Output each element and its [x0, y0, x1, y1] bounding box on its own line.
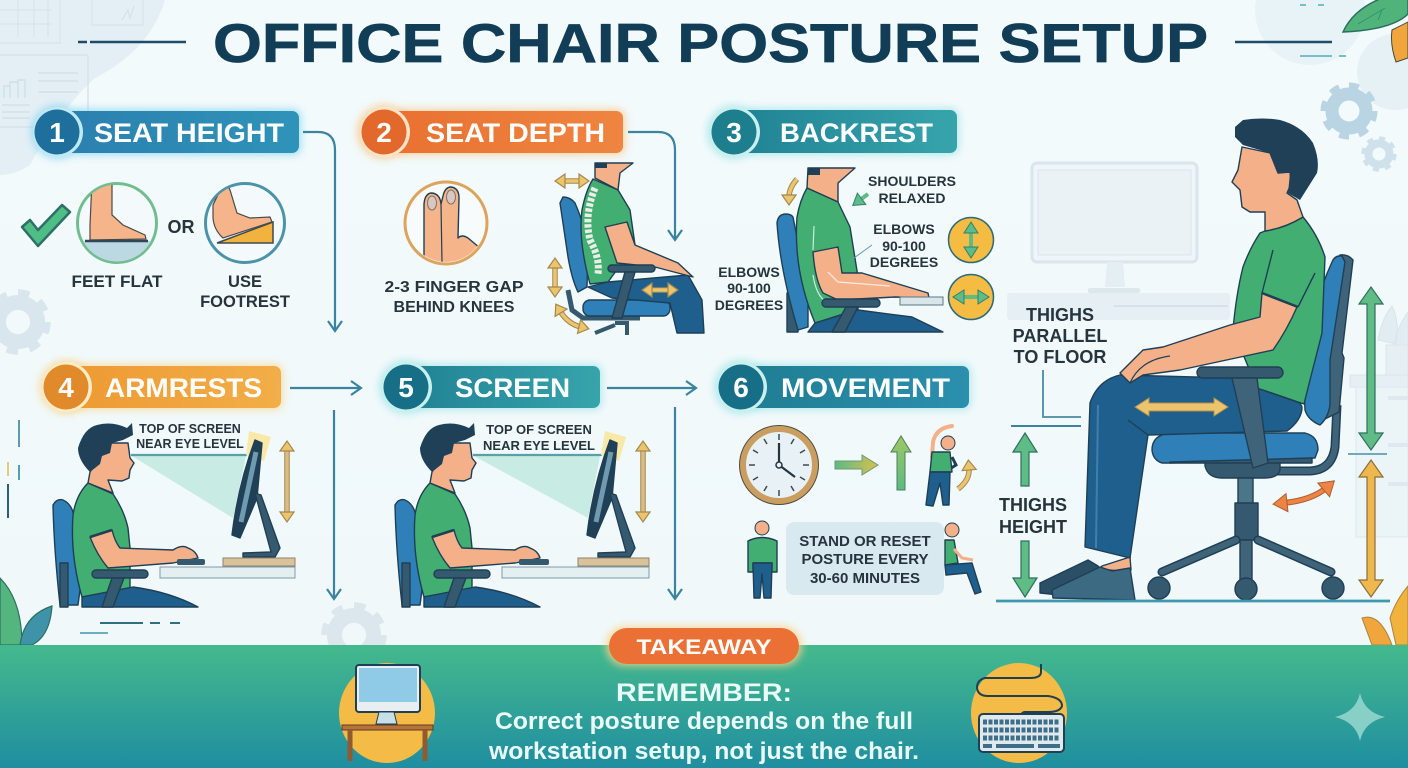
heading: armrests [39, 360, 283, 414]
heading: seat height: 1 [49, 117, 65, 148]
arrow: gold tilt [560, 311, 581, 327]
arrow: green up [891, 436, 911, 490]
arrow: step 1 to step 4 [303, 132, 335, 331]
panel: takeaway band [0, 626, 1408, 768]
callout: stand or reset: STAND OR RESET [799, 533, 931, 550]
arrow: gold down [789, 179, 797, 197]
label: elbows left: 90-100 [727, 280, 771, 296]
desk [160, 558, 295, 578]
viewing cone [132, 456, 246, 518]
icon: sparkle [1335, 693, 1385, 741]
label: shoulders relaxed: RELAXED [879, 190, 945, 206]
icon: vertical adjust [948, 218, 994, 262]
arrow: gold curved [958, 468, 969, 489]
figure: seated backrest [777, 168, 943, 332]
figure: standing person [748, 521, 777, 598]
heading: seat height: SEAT HEIGHT [94, 118, 285, 148]
icon: background gear left [0, 293, 47, 351]
heading: screen: SCREEN [455, 373, 570, 403]
panel: step 2 seat depth [357, 105, 704, 335]
icon: background gear small [1364, 138, 1394, 170]
label: thighs parallel: PARALLEL [1013, 326, 1107, 346]
label: thighs parallel: THIGHS [1026, 305, 1094, 325]
figure: seated person [1040, 118, 1325, 600]
heading: seat height [31, 105, 301, 159]
decorative background: top-left office motifs [0, 0, 165, 175]
label: elbows left: ELBOWS [718, 264, 780, 280]
icon: background gear bottom [321, 602, 387, 645]
arrow: step 2 to step 3 [628, 132, 675, 240]
label: thighs parallel: TO FLOOR [1014, 347, 1106, 367]
panel: step 4 armrests [39, 360, 295, 607]
callout: stand or reset: 30-60 MINUTES [810, 570, 920, 587]
arrow: green down [1013, 541, 1037, 597]
desk [502, 558, 649, 578]
arrow: orange tilt fill [1284, 488, 1326, 503]
label: elbows left: DEGREES [715, 297, 783, 313]
arrow: gold thigh [1135, 398, 1228, 416]
eye line [473, 454, 602, 456]
arrow: step 4 down [333, 410, 335, 599]
label: elbows center: 90-100 [882, 238, 926, 254]
panel: step 1 seat height [22, 105, 301, 311]
text: remember body: Correct posture depends on the full [495, 708, 913, 735]
icon: foot flat [76, 182, 158, 264]
viewing cone [474, 456, 600, 518]
figure: seated with spine [560, 163, 704, 335]
monitor [587, 440, 635, 557]
label: use footrest: USE [228, 273, 262, 291]
chair [1148, 255, 1353, 600]
icon: background gear large [1324, 86, 1374, 136]
label: top of screen: TOP OF SCREEN [139, 422, 241, 436]
figure: seated person [395, 423, 540, 607]
sticky note [601, 431, 626, 461]
figure: sitting person [945, 523, 981, 594]
label: thighs height: THIGHS [999, 495, 1067, 515]
heading: backrest: 3 [726, 117, 742, 148]
text: remember body: workstation setup, not just the chair. [488, 738, 919, 765]
heading: seat depth: 2 [376, 117, 392, 148]
arrow: monitor height [284, 449, 290, 514]
heading: seat depth: SEAT DEPTH [426, 118, 605, 148]
figure: seated person [53, 423, 198, 607]
arrow: monitor height [640, 449, 646, 514]
arrow: shoulders [860, 194, 868, 200]
figure: stretching person [926, 426, 956, 506]
decorative: bottom-right leaves [1362, 586, 1408, 645]
panel: step 3 backrest [707, 105, 994, 332]
title decoration right [1235, 41, 1332, 43]
label: shoulders relaxed: SHOULDERS [868, 173, 956, 189]
heading: armrests: ARMRESTS [105, 373, 262, 403]
title: OFFICE CHAIR POSTURE SETUP [213, 12, 1208, 74]
panel: step 6 movement [714, 360, 981, 598]
pointer line [847, 245, 872, 263]
label: top of screen: TOP OF SCREEN [486, 422, 592, 437]
arrow: gold width top [563, 178, 581, 184]
label: or: OR [168, 217, 195, 237]
heading: movement: MOVEMENT [781, 373, 951, 403]
heading: backrest: BACKREST [780, 118, 934, 148]
label: top of screen: NEAR EYE LEVEL [136, 437, 244, 451]
tick line [1348, 453, 1387, 455]
title decoration left [78, 41, 186, 43]
background monitor and desk [1007, 163, 1230, 320]
leader line [1043, 370, 1081, 417]
label: top of screen: NEAR EYE LEVEL [483, 438, 595, 453]
heading: screen [379, 360, 602, 414]
icon: clock [739, 425, 819, 505]
decorative: bottom-left leaves [0, 420, 180, 645]
arrow: green up [1013, 433, 1037, 486]
sticky note [246, 431, 271, 461]
decorative background: top-right leaves and circles [1255, 0, 1408, 110]
text: remember heading: REMEMBER: [616, 679, 792, 707]
label: feet flat: FEET FLAT [72, 273, 162, 291]
decorative background: right shelf and plant [1350, 306, 1408, 537]
arrow: step 5 down [674, 407, 676, 599]
heading: armrests: 4 [58, 372, 74, 403]
heading: seat depth [357, 105, 625, 159]
callout: stand or reset: POSTURE EVERY [802, 551, 928, 568]
arrow: gold height [552, 266, 558, 289]
arrow: step 5 to step 6 [607, 387, 696, 389]
label: use footrest: FOOTREST [200, 293, 290, 311]
reference line [1011, 425, 1081, 427]
label: elbows center: DEGREES [870, 254, 938, 270]
icon: check mark [22, 205, 70, 246]
icon: two finger gap [405, 182, 487, 270]
panel: step 5 screen [379, 360, 649, 607]
badge: takeaway [606, 626, 802, 666]
heading: movement [714, 360, 971, 414]
floor line [996, 600, 1390, 602]
icon: foot on footrest [206, 180, 284, 262]
label: finger gap: BEHIND KNEES [394, 299, 515, 316]
callout: stand or reset [786, 522, 944, 595]
arrow: gold seat depth [650, 287, 670, 293]
heading: screen: 5 [398, 372, 414, 403]
badge: takeaway: TAKEAWAY [636, 636, 772, 659]
icon: desk monitor [339, 663, 435, 763]
label: finger gap: 2-3 FINGER GAP [384, 279, 524, 296]
heading: movement: 6 [733, 372, 749, 403]
icon: horizontal adjust [948, 274, 994, 320]
heading: backrest [707, 105, 959, 159]
label: thighs height: HEIGHT [999, 517, 1067, 537]
monitor [232, 440, 280, 557]
arrow: gold double [1359, 460, 1383, 597]
label: elbows center: ELBOWS [873, 221, 935, 237]
arrow: orange tilt [1284, 488, 1326, 503]
arrow: step 4 to step 5 [290, 387, 361, 389]
arrow: gradient right [835, 455, 878, 475]
icon: keyboard [971, 663, 1067, 763]
panel: main posture figure [996, 118, 1390, 601]
eye line [131, 454, 247, 456]
arrow: green double [1359, 287, 1383, 450]
